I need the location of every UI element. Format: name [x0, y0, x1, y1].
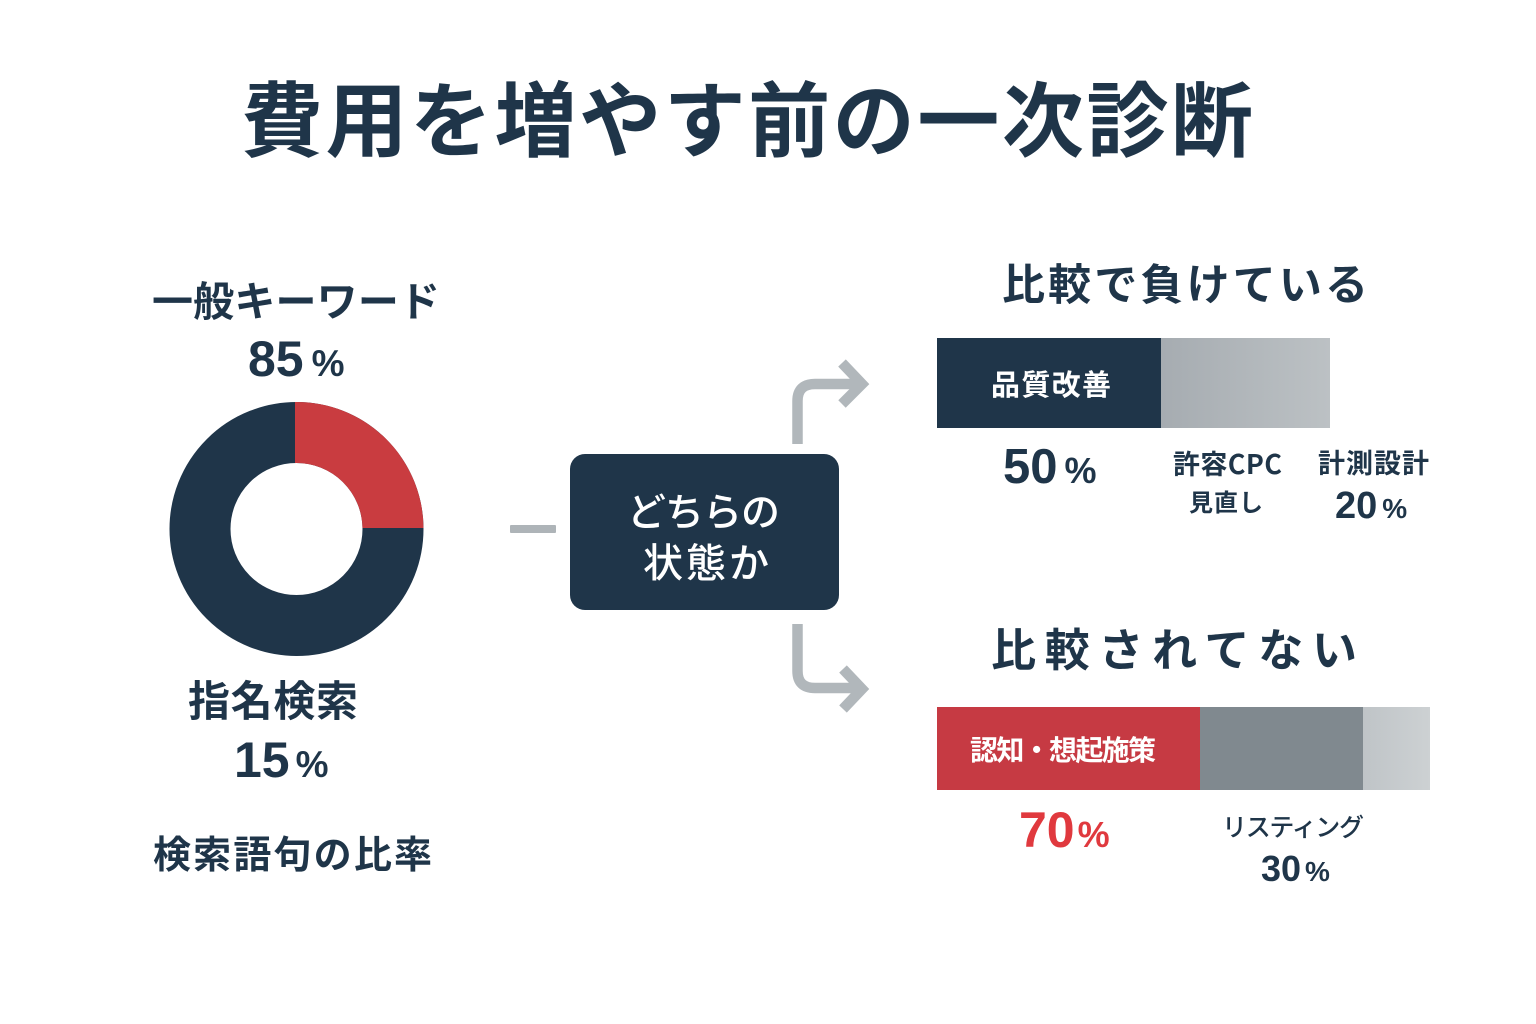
value: 70%: 70% [1019, 802, 1110, 858]
label: branded search: 指名検索 [188, 668, 358, 729]
value: 20%: 20% [1335, 485, 1407, 527]
label: general keywords: 一般キーワード [152, 268, 440, 328]
label: measurement design: 計測設計 [1318, 442, 1429, 481]
value: 50%: 50% [1003, 440, 1097, 494]
arrow: to lower branch [798, 624, 862, 709]
stacked bar [937, 707, 1430, 790]
value: 15%: 15% [234, 732, 329, 788]
panel: losing on comparison [937, 251, 1429, 527]
bar label: 認知・想起施策 [970, 729, 1156, 769]
decision text line 1: どちらの [627, 482, 780, 538]
panel: not being compared [937, 614, 1430, 889]
stacked bar [937, 338, 1330, 428]
decision text line 2: 状態か [643, 531, 769, 589]
heading: 比較されてない [991, 614, 1357, 679]
label: CPC review line 2: 見直し [1189, 483, 1263, 518]
label: CPC review line 1: 許容CPC [1173, 443, 1282, 482]
bar label: 品質改善 [991, 362, 1111, 404]
value: 85%: 85% [248, 331, 345, 387]
value: 30%: 30% [1261, 848, 1330, 889]
decision box [570, 454, 839, 610]
panel: search term ratio [152, 268, 440, 879]
heading: 比較で負けている [1002, 251, 1368, 313]
label: listing: リスティング [1222, 808, 1364, 844]
arrow: to upper branch [798, 363, 862, 444]
title: 費用を増やす前の一次診断 [241, 55, 1253, 174]
donut chart [200, 402, 424, 626]
caption: 検索語句の比率 [153, 824, 432, 879]
connector dash [510, 525, 556, 533]
